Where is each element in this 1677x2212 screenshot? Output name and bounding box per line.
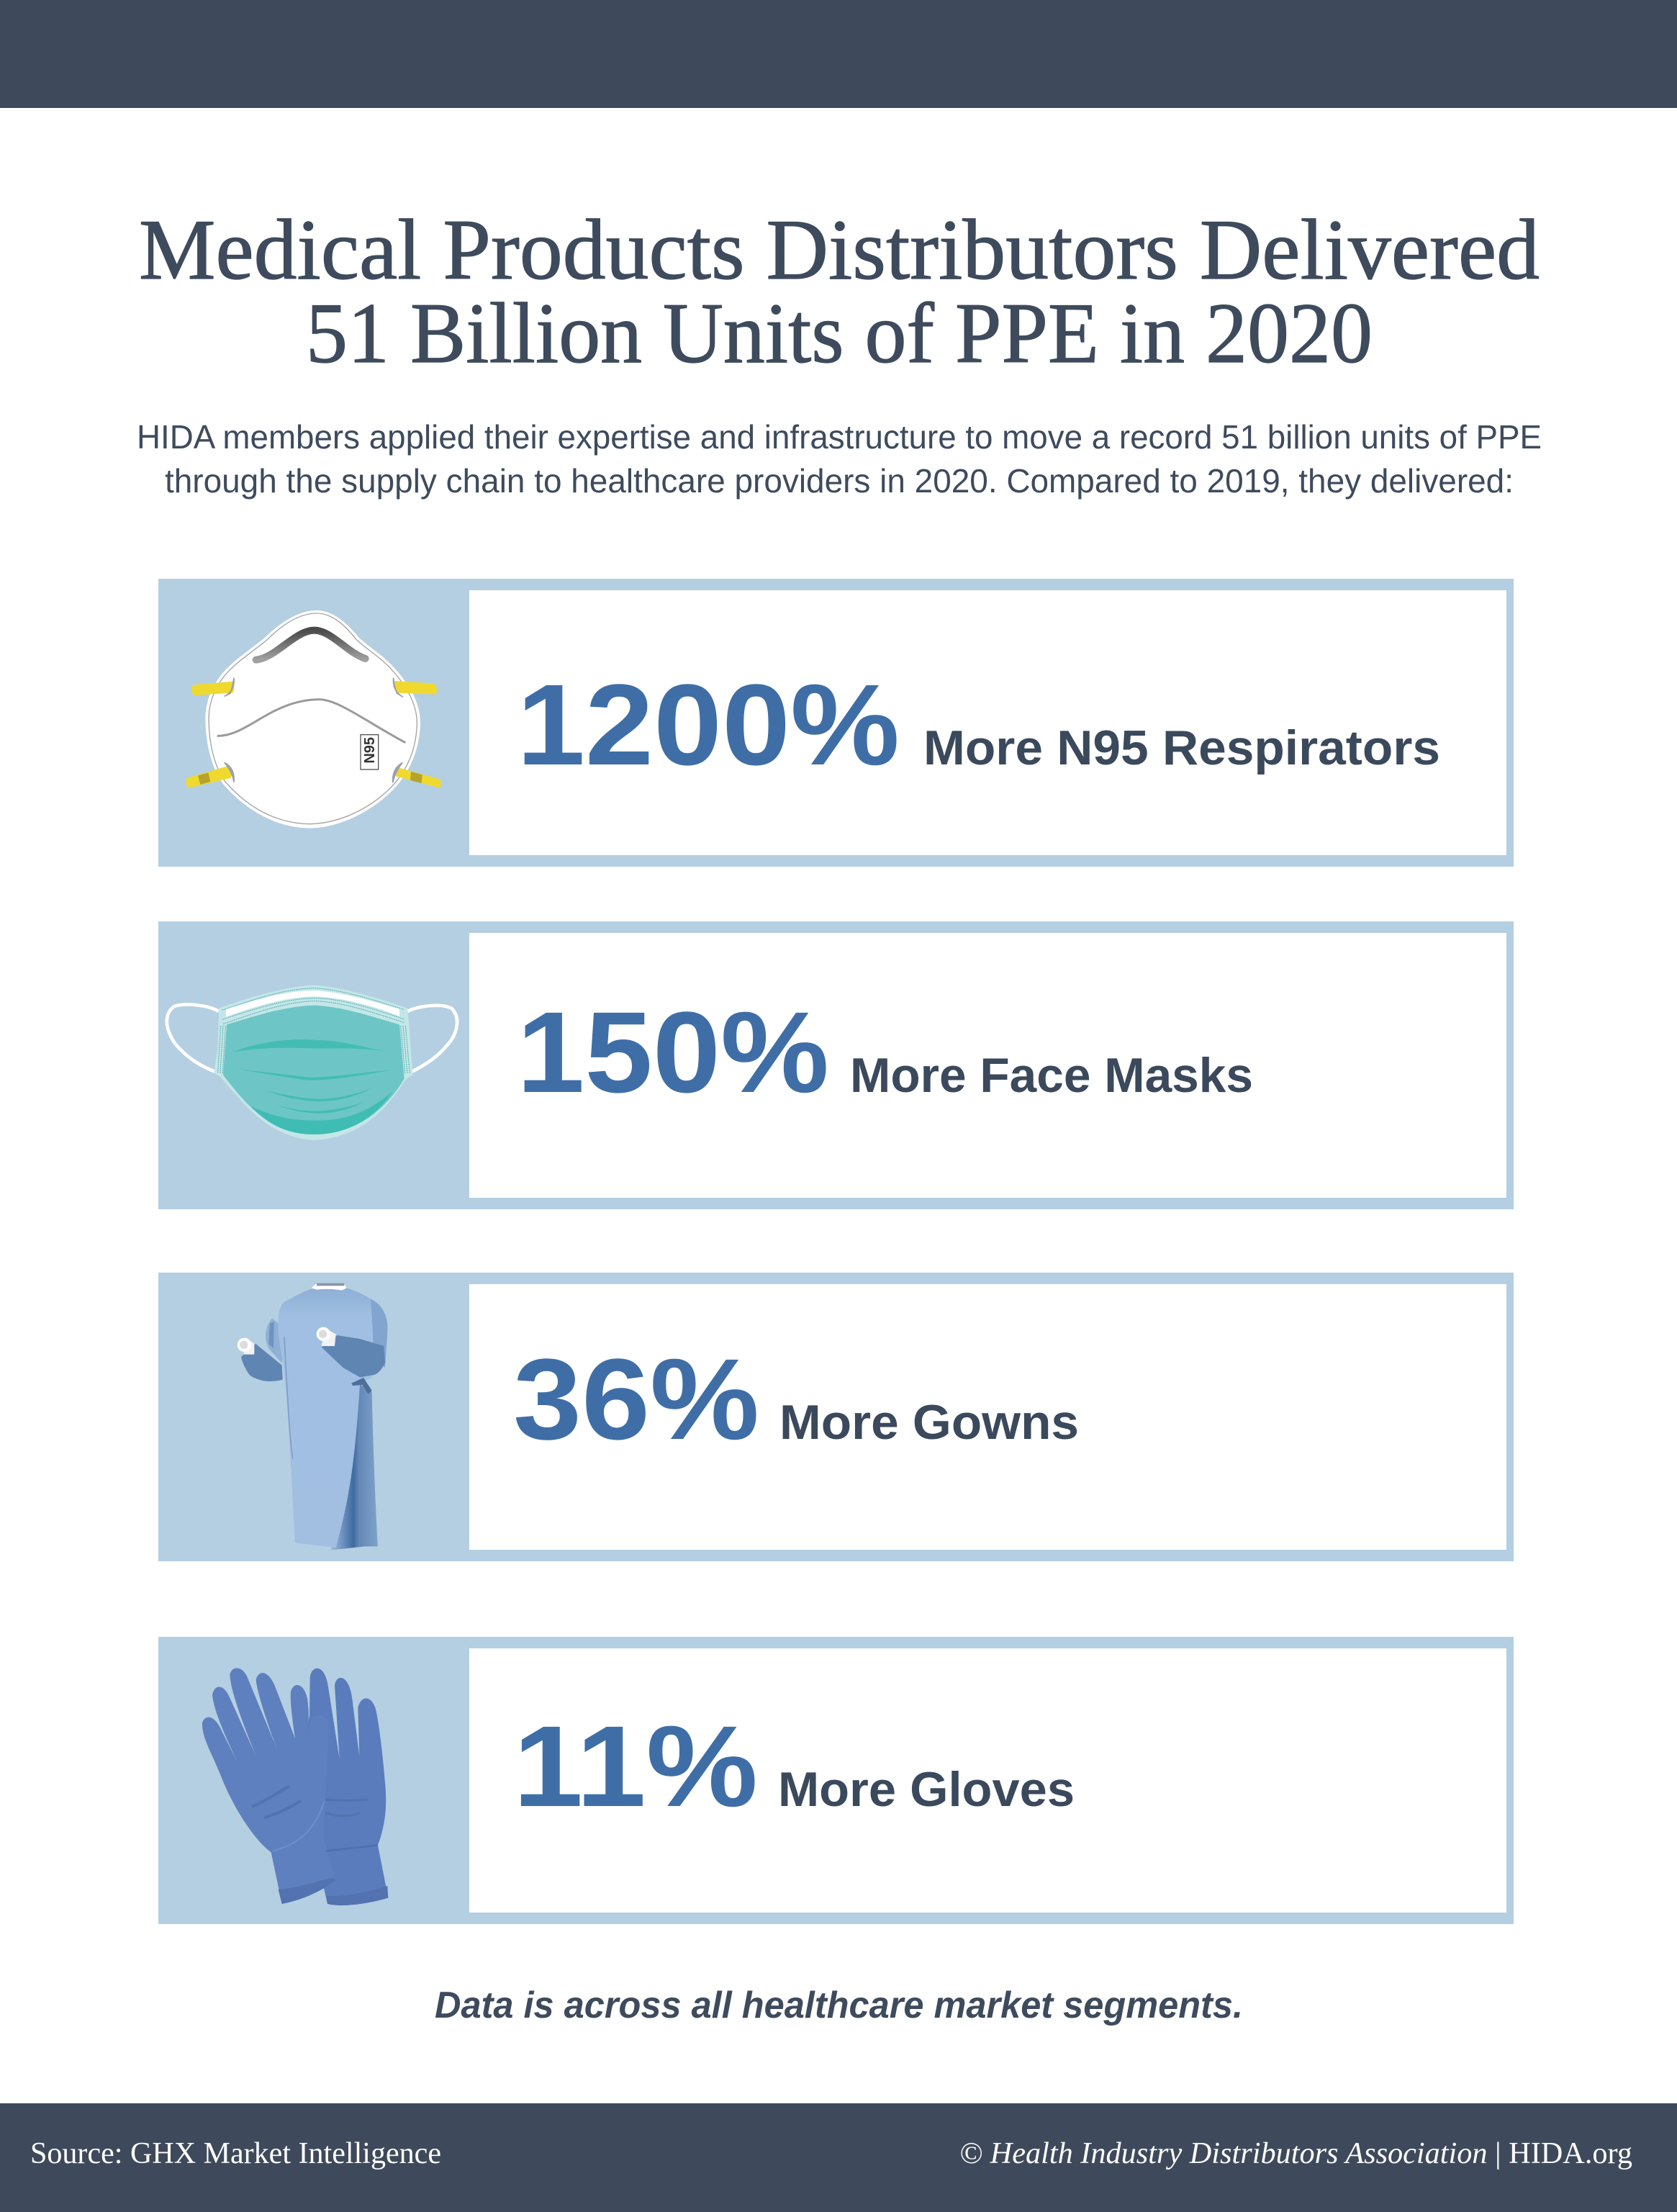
label: More N95 Respirators: More N95 Respirators xyxy=(923,721,1440,775)
icon: N95 respirator: N95 xyxy=(362,737,378,764)
icon: surgical mask xyxy=(167,985,457,1140)
label: More Gowns: More Gowns xyxy=(779,1395,1079,1450)
title xyxy=(139,202,1540,381)
big number: 150%: 150% xyxy=(517,988,829,1116)
footer band xyxy=(0,2103,1677,2212)
big number: 11%: 11% xyxy=(513,1702,758,1830)
big number: 36%: 36% xyxy=(513,1335,759,1463)
icon: gloves xyxy=(202,1668,388,1905)
intro text: HIDA members applied their expertise and infrastructure to move a record 51 billion units of PPE xyxy=(137,418,1542,456)
big number: 1200%: 1200% xyxy=(517,660,900,789)
panel: face masks xyxy=(158,921,1514,1209)
panel: gloves xyxy=(158,1637,1514,1924)
footer copyright: © Health Industry Distributors Association | HIDA.org xyxy=(959,2137,1632,2170)
intro text xyxy=(137,418,1542,500)
panel: gowns xyxy=(158,1273,1514,1561)
label: More Gloves: More Gloves xyxy=(778,1762,1075,1817)
footer source: Source: GHX Market Intelligence xyxy=(30,2137,441,2170)
label: More Face Masks: More Face Masks xyxy=(850,1048,1253,1103)
icon: isolation gown xyxy=(238,1283,388,1550)
note: data scope: Data is across all healthcare market segments. xyxy=(435,1985,1243,2026)
panel: N95 respirators xyxy=(158,579,1514,867)
icon: N95 respirator xyxy=(186,612,441,827)
intro text: through the supply chain to healthcare providers in 2020. Compared to 2019, they delivered: xyxy=(165,462,1514,500)
title: Medical Products Distributors Delivered xyxy=(139,202,1540,297)
header band xyxy=(0,0,1677,108)
title: 51 Billion Units of PPE in 2020 xyxy=(306,285,1373,381)
